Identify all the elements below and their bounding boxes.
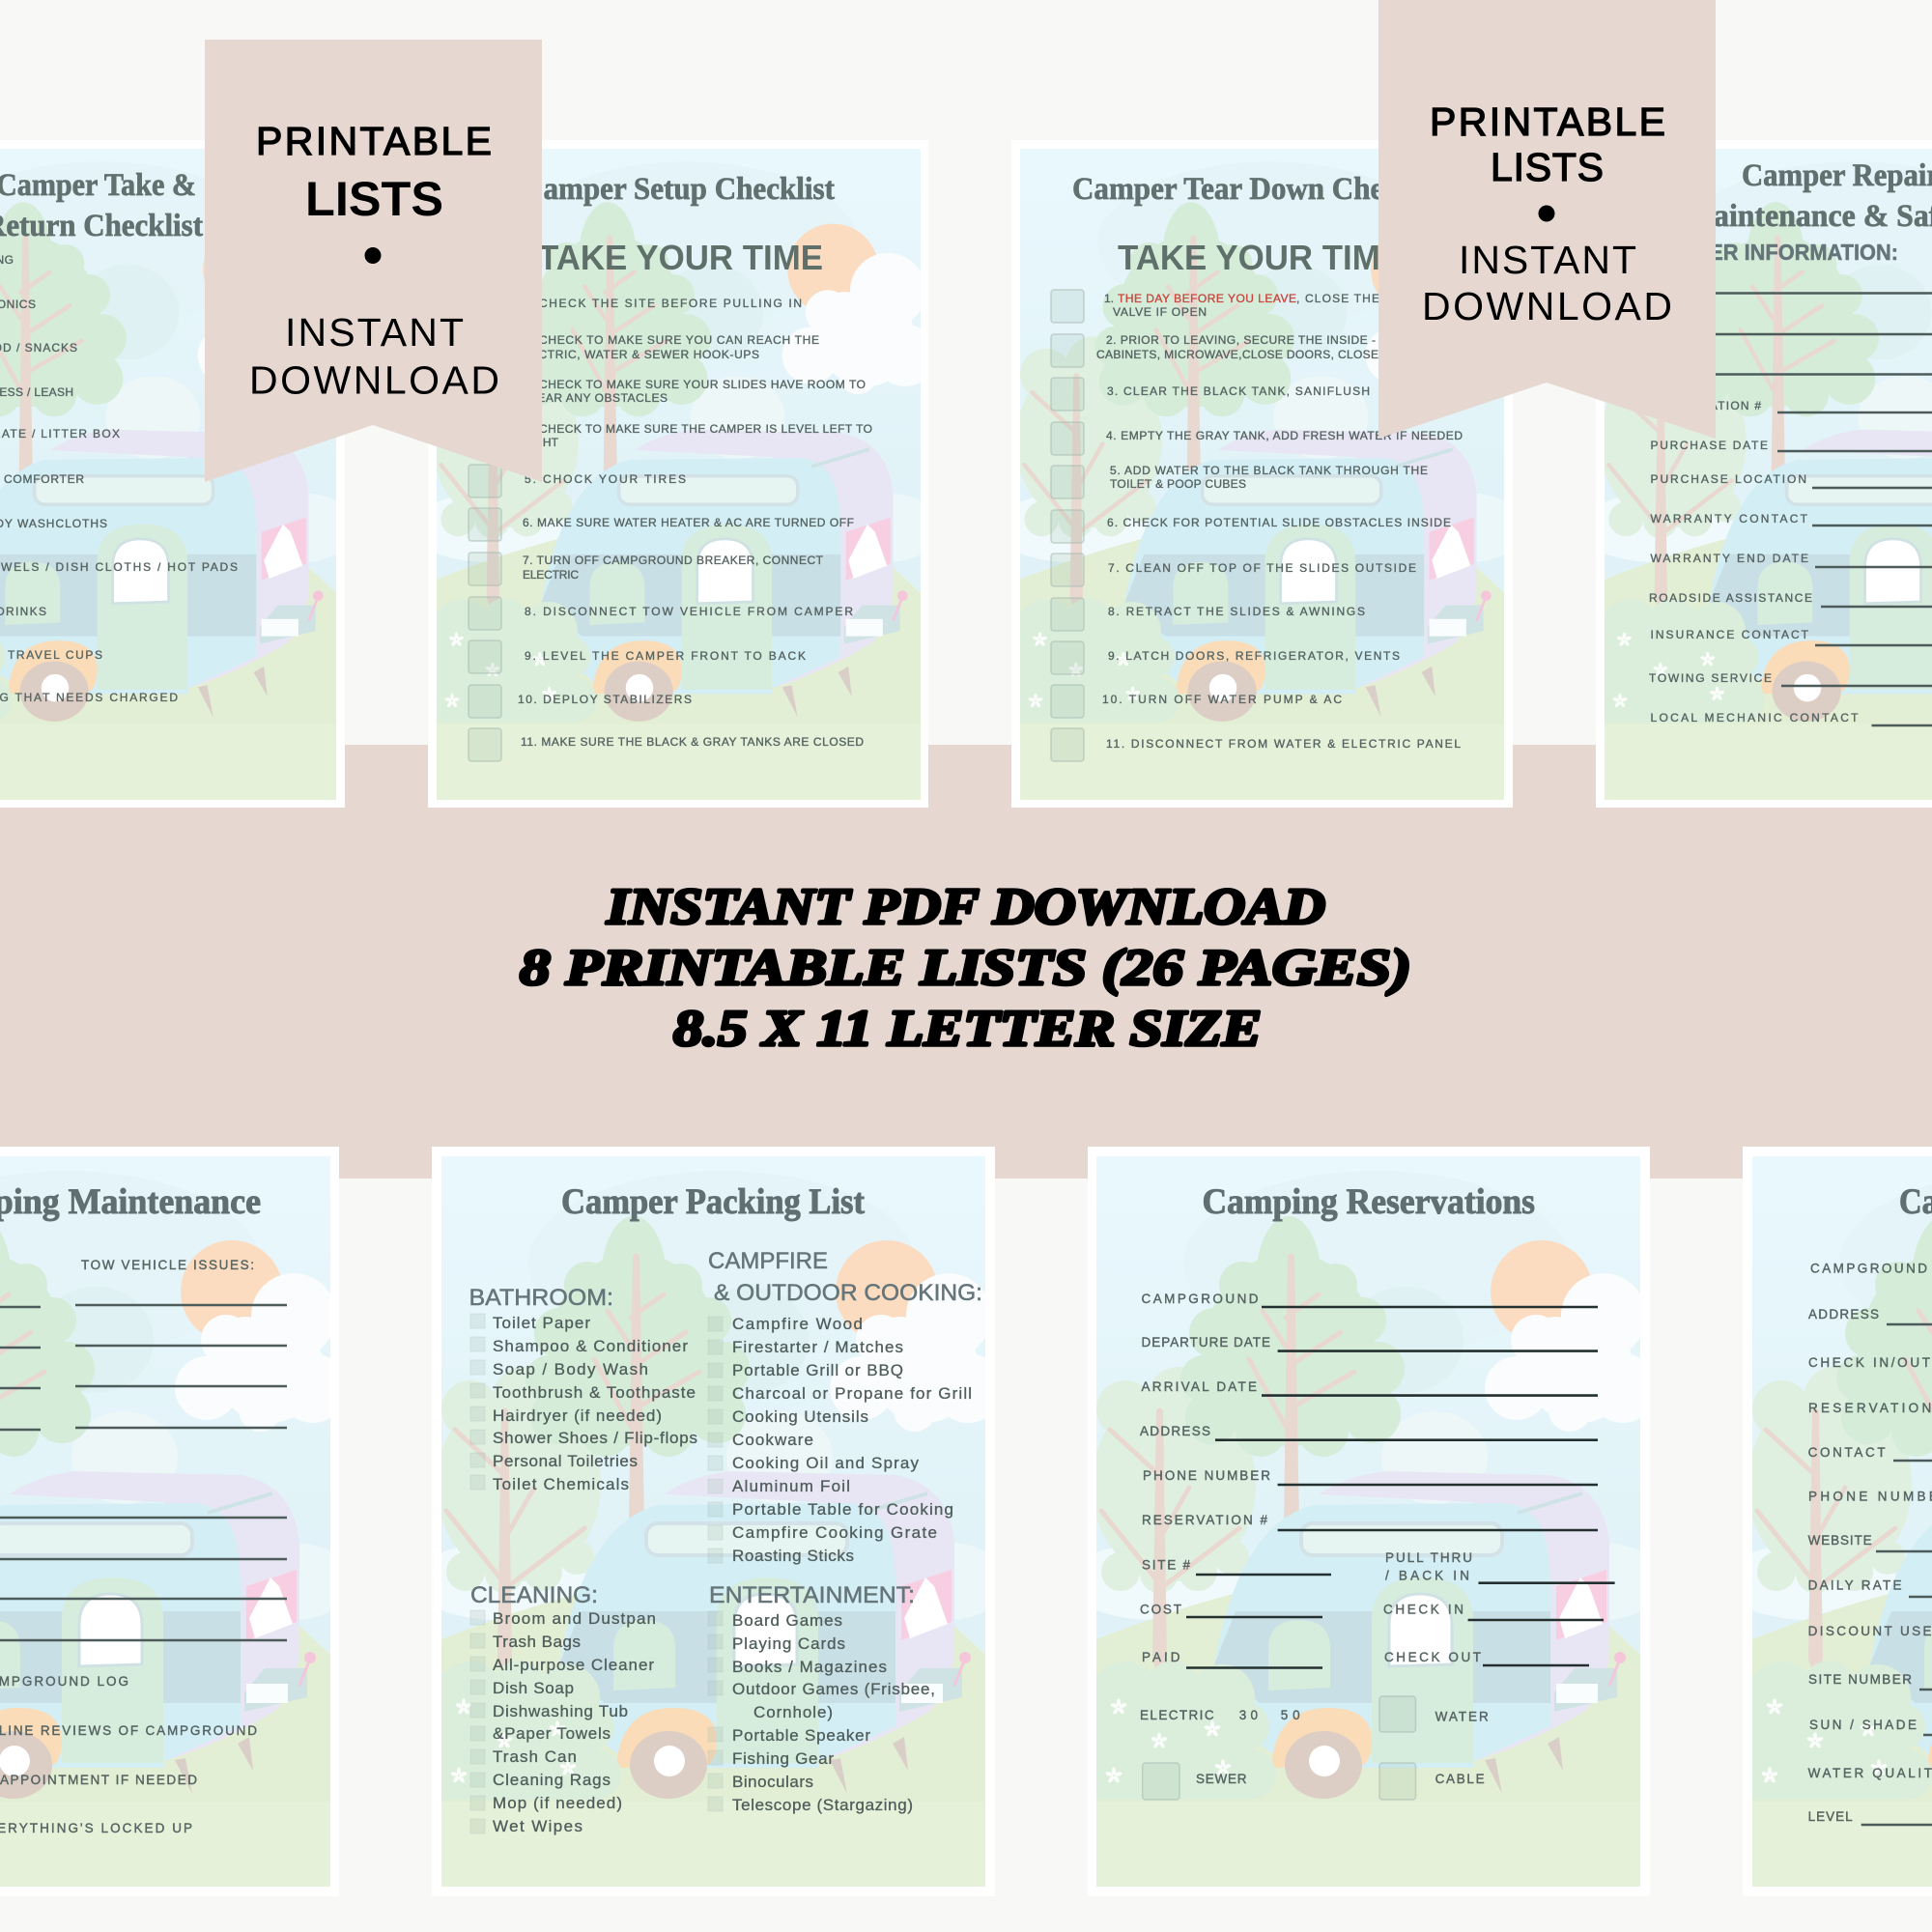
- list: tear down steps: 11. DISCONNECT FROM WATER & ELECTRIC PANEL: [1106, 737, 1461, 751]
- section: entertainment: Board Games: [732, 1611, 842, 1630]
- form: owner fields: PURCHASE DATE: [1650, 439, 1768, 452]
- panel: camping reservations: [1067, 1147, 1662, 1896]
- section: campfire and outdoor cooking: Campfire Cooking Grate: [732, 1523, 937, 1542]
- heading: owner information: OWNER INFORMATION:: [1658, 240, 1898, 265]
- heading: take your time: TAKE YOUR TIME: [1118, 238, 1403, 277]
- list: tear down steps: CABINETS, MICROWAVE,CLOSE DOORS, CLOSE: [1096, 348, 1378, 361]
- title: camper setup checklist: Camper Setup Checklist: [522, 172, 835, 207]
- title: camper repair maintenance: [1685, 158, 1932, 234]
- ribbon banner: printable lists right: DOWNLOAD: [1422, 284, 1672, 328]
- label: tow vehicle issues: TOW VEHICLE ISSUES:: [81, 1258, 254, 1272]
- list: setup steps: 11. MAKE SURE THE BLACK & GRAY TANKS ARE CLOSED: [521, 735, 864, 749]
- section: entertainment: ENTERTAINMENT:: [709, 1582, 915, 1608]
- title: camper take and return: [0, 168, 203, 243]
- options: hookups: 50: [1281, 1708, 1300, 1722]
- section: cleaning: CLEANING:: [470, 1582, 598, 1608]
- form: owner fields: REGISTRATION #: [1650, 399, 1761, 412]
- form: campground fields: CAMPGROUND: [1810, 1262, 1927, 1276]
- section: campfire and outdoor cooking: Charcoal or Propane for Grill: [732, 1384, 972, 1403]
- ribbon banner: printable lists right: PRINTABLE: [1430, 99, 1665, 144]
- section: campfire and outdoor cooking: & OUTDOOR COOKING:: [714, 1280, 982, 1306]
- section: campfire and outdoor cooking: Campfire Wood: [732, 1315, 863, 1333]
- form: reservation fields: / BACK IN: [1385, 1569, 1469, 1582]
- section: bathroom: Hairdryer (if needed): [493, 1406, 662, 1425]
- list: setup steps: CHECK TO MAKE SURE THE CAMPER IS LEVEL LEFT TO: [539, 422, 872, 436]
- ribbon banner: printable lists left: PRINTABLE: [256, 119, 492, 163]
- panel: campground log: [1723, 1147, 1932, 1896]
- form: owner fields: INSURANCE CONTACT: [1650, 628, 1809, 641]
- form: owner fields: WARRANTY CONTACT: [1650, 512, 1808, 526]
- ribbon banner: printable lists right: [1378, 0, 1716, 439]
- list: setup steps: 8. DISCONNECT TOW VEHICLE FROM CAMPER: [525, 605, 853, 618]
- section: bathroom: Personal Toiletries: [493, 1452, 638, 1470]
- list: setup steps: CLEAR ANY OBSTACLES: [522, 391, 668, 405]
- list: setup steps: CHECK TO MAKE SURE YOUR SLIDES HAVE ROOM TO: [539, 378, 866, 391]
- section: campfire and outdoor cooking: Portable Grill or BBQ: [732, 1361, 903, 1379]
- list: tear down steps: 9. LATCH DOORS, REFRIGERATOR, VENTS: [1108, 649, 1400, 663]
- form: reservation fields: CHECK IN: [1383, 1603, 1463, 1617]
- form: reservation fields: SITE #: [1142, 1558, 1190, 1573]
- title: camper tear down checklist: Camper Tear Down Checklist: [1072, 172, 1452, 207]
- checkboxes: [1051, 290, 1084, 761]
- panel: camper tear down checklist: [994, 140, 1523, 808]
- form: reservation fields: [1140, 1292, 1615, 1667]
- options: hookups: ELECTRIC: [1140, 1708, 1214, 1722]
- list: tear down steps: 7. CLEAN OFF TOP OF THE SLIDES OUTSIDE: [1108, 561, 1416, 575]
- headline: instant pdf download: 8.5 X 11 LETTER SIZE: [673, 1001, 1262, 1057]
- section: cleaning: Wet Wipes: [493, 1817, 582, 1835]
- form: reservation fields: ADDRESS: [1140, 1424, 1210, 1438]
- section: bathroom: [469, 1285, 697, 1493]
- form: owner fields: PURCHASE LOCATION: [1650, 472, 1806, 486]
- list: setup steps: CHECK THE SITE BEFORE PULLING IN: [539, 297, 802, 310]
- panel: camper take and return checklist: [0, 140, 355, 808]
- bullet dot: [365, 247, 381, 264]
- list: take and return items: COMFORTER: [4, 472, 84, 486]
- form: owner fields: WARRANTY END DATE: [1650, 552, 1808, 565]
- list: take and return items: TRAVEL CUPS: [8, 648, 102, 662]
- section: entertainment: [708, 1582, 935, 1814]
- form: campground fields: WEBSITE: [1808, 1533, 1872, 1548]
- list: setup steps: 5. CHOCK YOUR TIRES: [525, 472, 686, 486]
- options: hookups: 30: [1239, 1708, 1258, 1722]
- form: campground fields: DAILY RATE: [1808, 1578, 1901, 1592]
- form: reservation fields: CAMPGROUND: [1142, 1292, 1259, 1306]
- section: bathroom: Toilet Paper: [493, 1314, 590, 1332]
- list: setup steps: [515, 297, 872, 749]
- section: entertainment: Cornhole): [753, 1703, 833, 1721]
- list: tear down steps: 4. EMPTY THE GRAY TANK, ADD FRESH WATER IF NEEDED: [1106, 429, 1463, 442]
- checkboxes: [469, 465, 501, 761]
- section: bathroom: Shower Shoes / Flip-flops: [493, 1429, 697, 1447]
- section: campfire and outdoor cooking: Firestarter / Matches: [732, 1338, 903, 1356]
- title: camper take and return: Camper Take &: [0, 168, 196, 203]
- form: campground fields: [1808, 1262, 1932, 1825]
- list: setup steps: 6. MAKE SURE WATER HEATER & AC ARE TURNED OFF: [523, 516, 854, 529]
- form: owner fields: TOWING SERVICE: [1649, 671, 1772, 685]
- options: hookups: [1140, 1696, 1489, 1800]
- section: cleaning: &Paper Towels: [493, 1724, 611, 1743]
- section: campfire and outdoor cooking: Cooking Oil and Spray: [732, 1454, 920, 1472]
- list: maintenance reminders: APPOINTMENT IF NEEDED: [0, 1773, 197, 1787]
- section: cleaning: Mop (if needed): [493, 1794, 622, 1812]
- panel: camper setup checklist: [411, 140, 940, 808]
- list: tear down steps: 10. TURN OFF WATER PUMP & AC: [1102, 693, 1342, 706]
- section: bathroom: Soap / Body Wash: [493, 1360, 648, 1378]
- ribbon banner: printable lists right: LISTS: [1491, 145, 1604, 189]
- section: campfire and outdoor cooking: Cooking Utensils: [732, 1407, 868, 1426]
- list: setup steps: RIGHT: [522, 436, 559, 449]
- section: campfire and outdoor cooking: Cookware: [732, 1431, 813, 1449]
- section: entertainment: Fishing Gear: [732, 1749, 834, 1768]
- list: setup steps: 9. LEVEL THE CAMPER FRONT TO BACK: [525, 649, 806, 663]
- panel: camping maintenance: [0, 1147, 352, 1896]
- list: tear down steps: 8. RETRACT THE SLIDES & AWNINGS: [1108, 605, 1365, 618]
- form: reservation fields: PULL THRU: [1385, 1550, 1472, 1565]
- heading: take your time: TAKE YOUR TIME: [538, 238, 823, 277]
- form: owner fields: LOCAL MECHANIC CONTACT: [1650, 711, 1859, 724]
- list: tear down steps: VALVE IF OPEN: [1113, 305, 1207, 319]
- form: reservation fields: COST: [1140, 1603, 1181, 1617]
- section: entertainment: Portable Speaker: [732, 1726, 870, 1745]
- list: tear down steps: , CLOSE THE: [1296, 292, 1379, 305]
- list: tear down steps: 2. PRIOR TO LEAVING, SECURE THE INSIDE -: [1106, 333, 1376, 347]
- title: camper packing list: Camper Packing List: [561, 1182, 866, 1222]
- section: cleaning: Dish Soap: [493, 1679, 574, 1697]
- headline: instant pdf download: 8 PRINTABLE LISTS (26 PAGES): [520, 940, 1411, 996]
- section: bathroom: Toothbrush & Toothpaste: [493, 1383, 696, 1402]
- ribbon banner: printable lists left: DOWNLOAD: [249, 358, 499, 403]
- form: campground fields: SUN / SHADE: [1809, 1718, 1917, 1732]
- section: campfire and outdoor cooking: [708, 1248, 982, 1565]
- form lines: [0, 1305, 287, 1640]
- list: maintenance reminders: [0, 1674, 257, 1835]
- form: campground fields: ADDRESS: [1808, 1307, 1879, 1321]
- list: tear down steps: THE DAY BEFORE YOU LEAVE: [1118, 292, 1296, 305]
- form: campground fields: LEVEL: [1808, 1809, 1853, 1824]
- headline: instant pdf download: INSTANT PDF DOWNLOAD: [606, 879, 1325, 935]
- section: cleaning: [470, 1582, 656, 1835]
- ribbon banner: printable lists left: INSTANT: [285, 310, 464, 355]
- form: owner fields: ROADSIDE ASSISTANCE: [1649, 591, 1812, 605]
- headline: instant pdf download: [520, 879, 1411, 1057]
- section: campfire and outdoor cooking: CAMPFIRE: [708, 1248, 828, 1274]
- panel: camper repair, maintenance and safety: [1578, 140, 1932, 808]
- form: reservation fields: DEPARTURE DATE: [1142, 1335, 1270, 1350]
- pink centre band: [0, 745, 1932, 1179]
- section: campfire and outdoor cooking: Portable Table for Cooking: [732, 1500, 953, 1519]
- section: cleaning: Trash Can: [493, 1747, 577, 1766]
- form: reservation fields: RESERVATION #: [1142, 1513, 1267, 1527]
- section: entertainment: Books / Magazines: [732, 1658, 887, 1676]
- section: campfire and outdoor cooking: Roasting Sticks: [732, 1547, 854, 1565]
- section: cleaning: Broom and Dustpan: [493, 1609, 656, 1628]
- bullet dot: [1538, 205, 1555, 222]
- ribbon banner: printable lists right: INSTANT: [1459, 238, 1636, 282]
- section: campfire and outdoor cooking: Aluminum Foil: [732, 1477, 850, 1495]
- section: bathroom: Toilet Chemicals: [493, 1475, 629, 1493]
- list: setup steps: 10. DEPLOY STABILIZERS: [518, 693, 692, 706]
- list: setup steps: ELECTRIC: [523, 568, 579, 582]
- list: setup steps: CHECK TO MAKE SURE YOU CAN REACH THE: [539, 333, 819, 347]
- list: tear down steps: 5. ADD WATER TO THE BLACK TANK THROUGH THE: [1110, 464, 1428, 477]
- form: reservation fields: PAID: [1142, 1650, 1180, 1664]
- section: cleaning: Cleaning Rags: [493, 1771, 611, 1789]
- title: camping reservations: Camping Reservations: [1202, 1182, 1535, 1222]
- list: tear down steps: TOILET & POOP CUBES: [1110, 477, 1246, 491]
- section: bathroom: BATHROOM:: [469, 1285, 613, 1311]
- form: campground fields: CHECK IN/OUT: [1808, 1355, 1930, 1370]
- section: entertainment: Playing Cards: [732, 1634, 845, 1653]
- section: cleaning: All-purpose Cleaner: [493, 1656, 654, 1674]
- ribbon banner: printable lists left: [205, 40, 542, 482]
- options: hookups: SEWER: [1196, 1772, 1247, 1786]
- form: owner fields: [1642, 294, 1932, 725]
- form: reservation fields: ARRIVAL DATE: [1142, 1379, 1257, 1394]
- section: entertainment: Binoculars: [732, 1773, 813, 1791]
- section: entertainment: Outdoor Games (Frisbee,: [732, 1680, 935, 1698]
- list: take and return items: [0, 253, 238, 704]
- options: hookups: CABLE: [1435, 1772, 1485, 1786]
- options: hookups: WATER: [1435, 1710, 1489, 1723]
- form: reservation fields: CHECK OUT: [1384, 1650, 1481, 1664]
- section: cleaning: Dishwashing Tub: [493, 1702, 628, 1720]
- section: bathroom: Shampoo & Conditioner: [493, 1337, 688, 1355]
- list: tear down steps: 3. CLEAR THE BLACK TANK, SANIFLUSH: [1107, 384, 1370, 398]
- list: tear down steps: [1096, 292, 1463, 751]
- list: setup steps: ELECTRIC, WATER & SEWER HOOK-UPS: [515, 348, 759, 361]
- section: cleaning: Trash Bags: [493, 1633, 581, 1651]
- form: reservation fields: PHONE NUMBER: [1143, 1468, 1270, 1483]
- form: campground fields: CONTACT: [1808, 1445, 1886, 1460]
- list: setup steps: 7. TURN OFF CAMPGROUND BREAKER, CONNECT: [523, 554, 824, 567]
- list: tear down steps: 1.: [1104, 292, 1114, 305]
- form: campground fields: SITE NUMBER: [1808, 1672, 1912, 1687]
- section: entertainment: Telescope (Stargazing): [732, 1796, 913, 1814]
- ribbon banner: printable lists left: LISTS: [305, 172, 443, 226]
- panel: camper packing list: [412, 1147, 1007, 1896]
- list: tear down steps: 6. CHECK FOR POTENTIAL SLIDE OBSTACLES INSIDE: [1107, 516, 1451, 529]
